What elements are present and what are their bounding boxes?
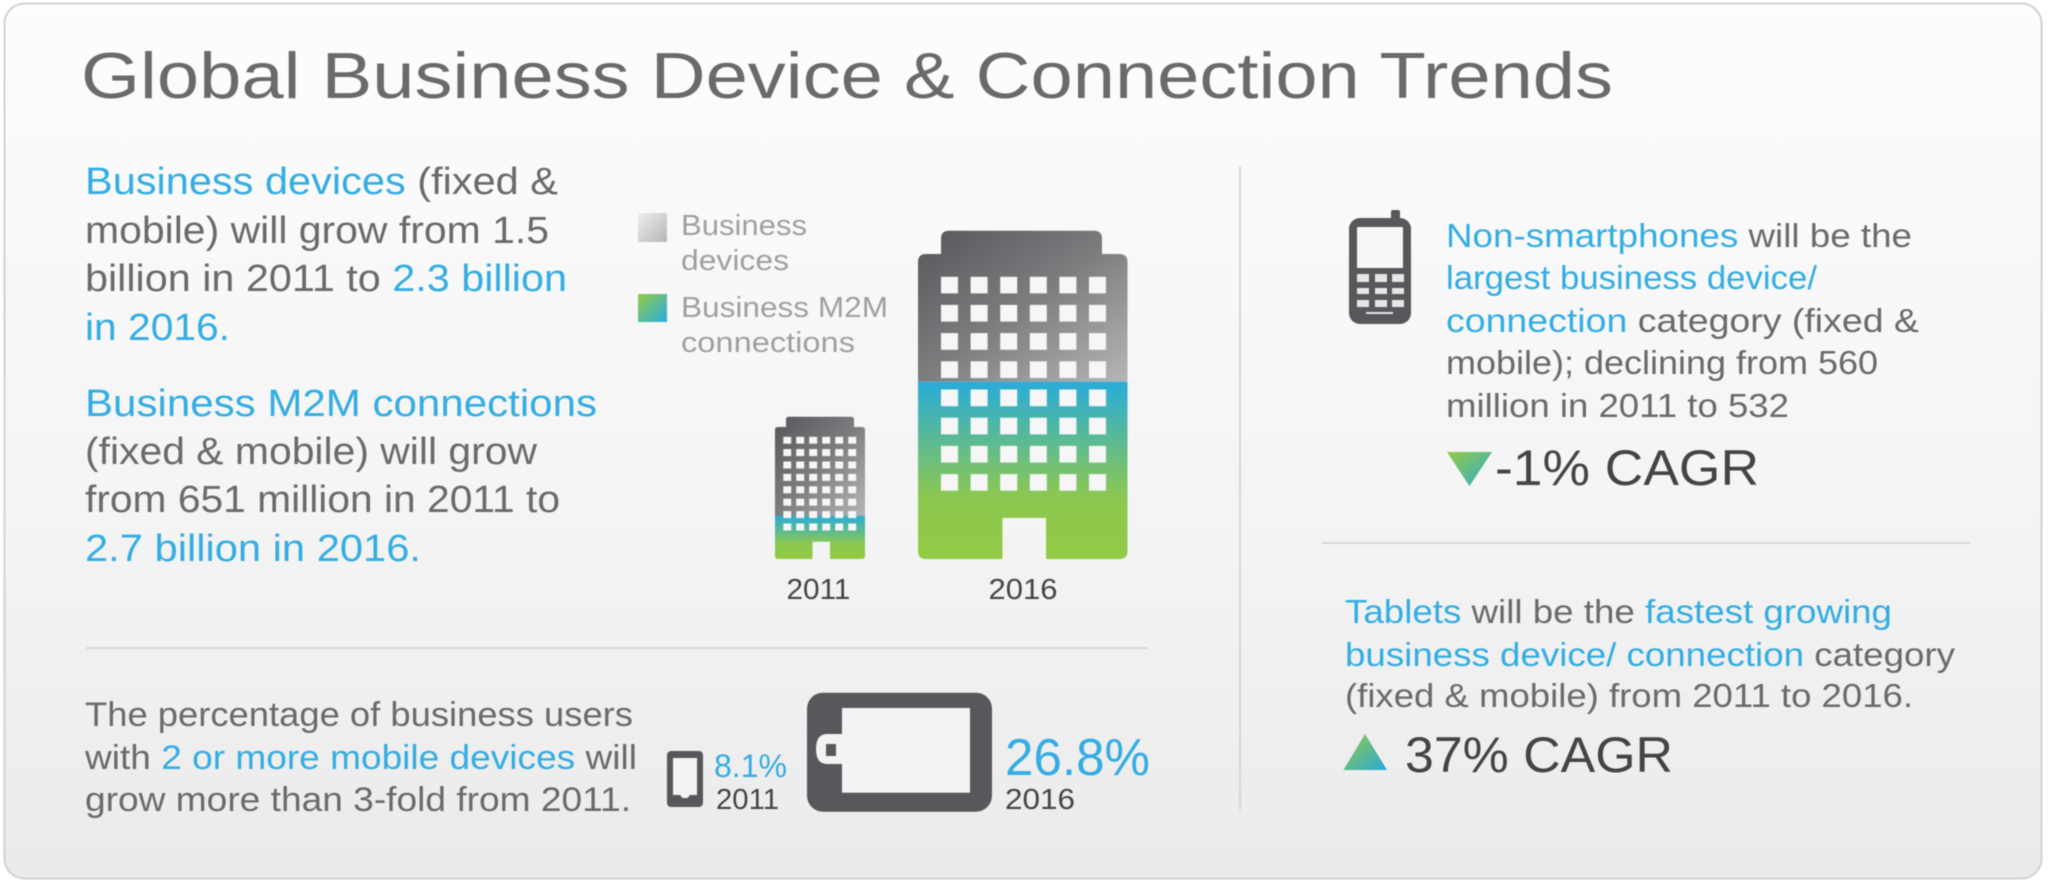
legend: Business M2M (681, 292, 888, 324)
text block: business M2M connections (85, 383, 597, 570)
icon: large tablet 2016 (807, 693, 992, 812)
text block: business M2M connections: from 651 million in 2011 to (85, 479, 560, 521)
text block: business devices: in 2016. (85, 307, 230, 349)
text block: non-smartphones: mobile); declining from 560 (1446, 344, 1878, 381)
stat: 26.8% 2016: 26.8% (1005, 729, 1150, 787)
legend: devices (681, 245, 789, 277)
icon: down triangle (1447, 452, 1492, 486)
text block: 2 or more mobile devices: with 2 or more mobile devices will (84, 739, 637, 777)
stat: 26.8% 2016 (1005, 729, 1150, 816)
text block: 2 or more mobile devices: The percentage of business users (85, 696, 633, 734)
stat: 26.8% 2016: 2016 (1005, 784, 1075, 816)
text block: tablets: business device/ connection category (1345, 636, 1956, 673)
title: Global Business Device & Connection Trends (81, 39, 1613, 112)
text block: business devices: Business devices (fixed & (85, 161, 558, 203)
text block: non-smartphones: Non-smartphones will be the (1446, 217, 1912, 254)
text block: non-smartphones: connection category (fixed & (1446, 302, 1919, 339)
stat: 8.1% 2011: 8.1% (714, 748, 787, 784)
stat: 8.1% 2011: 2011 (716, 784, 779, 816)
text block: business M2M connections: (fixed & mobile) will grow (85, 431, 538, 473)
chart: small building 2011 (775, 417, 865, 559)
label: 2011: 2011 (786, 574, 850, 606)
text block: tablets: Tablets will be the fastest growing (1345, 593, 1892, 630)
text block: business devices: billion in 2011 to 2.3 billion (85, 258, 567, 300)
legend: Business (681, 210, 807, 242)
text block: business M2M connections: 2.7 billion in 2016. (85, 528, 421, 570)
chart: large building 2016 (918, 231, 1128, 559)
icon: feature phone (1349, 210, 1411, 324)
stat: -1% CAGR: -1% CAGR (1495, 440, 1759, 496)
icon: small tablet 2011 (667, 751, 703, 807)
stat: 8.1% 2011 (714, 748, 787, 816)
icon: up triangle (1344, 734, 1387, 770)
stat: 37% CAGR: 37% CAGR (1405, 727, 1673, 783)
text block: non-smartphones (1446, 217, 1919, 424)
text block: business devices: mobile) will grow from 1.5 (85, 210, 549, 252)
text block: non-smartphones: million in 2011 to 532 (1446, 387, 1789, 424)
legend: connections (681, 327, 855, 359)
text block: tablets (1345, 593, 1956, 714)
text block: business devices (85, 161, 567, 349)
text block: business M2M connections: Business M2M connections (85, 383, 597, 425)
label: 2016: 2016 (988, 574, 1058, 606)
text block: tablets: (fixed & mobile) from 2011 to 2016. (1345, 677, 1913, 714)
legend (638, 210, 888, 359)
text block: 2 or more mobile devices: grow more than 3-fold from 2011. (85, 781, 631, 819)
text block: non-smartphones: largest business device/ (1446, 259, 1818, 296)
text block: 2 or more mobile devices (84, 696, 637, 819)
